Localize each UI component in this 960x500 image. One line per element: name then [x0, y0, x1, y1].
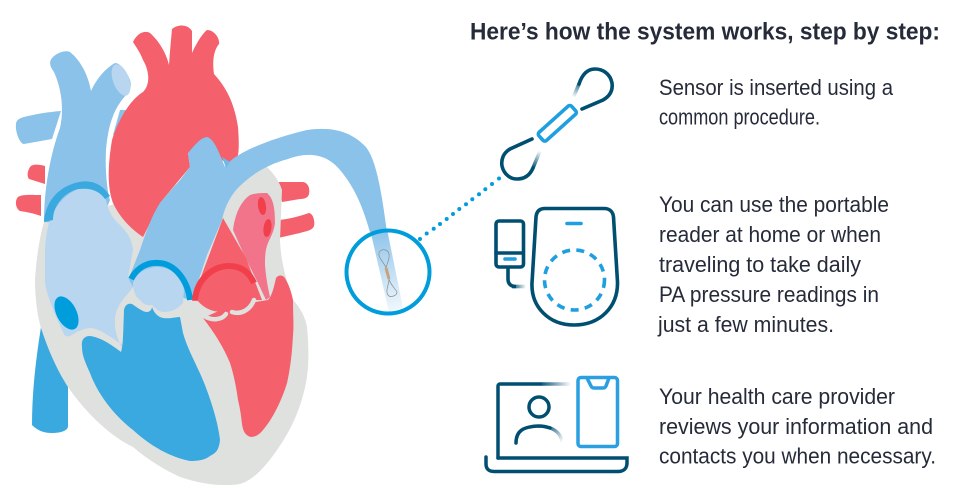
- text: step 3: [659, 384, 936, 468]
- magnifier background: [346, 230, 430, 314]
- icon: portable reader: [496, 208, 618, 325]
- phone notch: [587, 378, 609, 388]
- person head: [529, 397, 549, 417]
- heart illustration: [16, 25, 387, 485]
- magnifier: sensor in pulmonary artery: [346, 229, 430, 314]
- pulmonary valve arc: [131, 263, 190, 300]
- aorta: [109, 25, 239, 237]
- sensor body: [537, 104, 577, 142]
- adapter indicator: [505, 257, 515, 261]
- right pulmonary veins: [278, 182, 314, 238]
- phone body: [578, 378, 618, 446]
- left atrium: [233, 193, 275, 300]
- sensor bottom loop fade: [533, 151, 540, 168]
- aortic valve arc: [195, 266, 254, 300]
- adapter cord fade: [512, 285, 526, 288]
- pulmonary valve leaflets: [133, 267, 184, 312]
- text: step 1: common procedure.: [659, 104, 820, 130]
- left pulmonary artery branch: [16, 111, 61, 144]
- power adapter: [496, 221, 524, 267]
- text: step 1: Sensor is inserted using a: [659, 75, 894, 100]
- text: step 3: contacts you when necessary.: [659, 444, 936, 468]
- sensor top loop fade: [573, 84, 579, 98]
- reader dashed coil: [544, 250, 604, 310]
- pulmonary artery and tube: [128, 129, 387, 300]
- person shoulders: [516, 426, 550, 443]
- superior vena cava: [44, 51, 131, 225]
- laptop base: [486, 457, 627, 472]
- sensor top loop: [579, 69, 612, 109]
- aortic valve leaflets: [197, 270, 256, 312]
- icon: laptop and phone: [486, 378, 627, 472]
- right atrium: [45, 188, 133, 348]
- tiny sensor: [379, 250, 397, 296]
- text: step 2: [657, 192, 889, 337]
- right ventricle: [82, 304, 220, 461]
- sensor bottom loop: [502, 139, 533, 179]
- icon: sensor: [502, 69, 612, 179]
- text: step 2: traveling to take daily: [659, 252, 861, 277]
- left pulmonary veins: [16, 165, 45, 216]
- small pulmonary branch behind aorta: [113, 110, 132, 135]
- text: step 3: Your health care provider: [659, 384, 895, 409]
- text: step 3: reviews your information and: [659, 414, 933, 439]
- adapter divider: [496, 251, 523, 255]
- reader body: [532, 208, 618, 325]
- left ventricle: [203, 276, 293, 437]
- reader indicator: [567, 222, 581, 225]
- text: step 2: You can use the portable: [659, 192, 889, 217]
- right atrium opening: [49, 292, 84, 334]
- left atrium vein openings: [257, 197, 273, 237]
- text: step 2: just a few minutes.: [657, 312, 834, 337]
- person shoulders fade: [549, 428, 562, 442]
- dotted connector: [418, 176, 501, 241]
- arch shadow: [222, 157, 230, 168]
- heart muscle wall: [35, 167, 308, 485]
- right atrium valve arc: [44, 181, 110, 222]
- text: step 2: PA pressure readings in: [659, 282, 879, 307]
- aortic outflow: [192, 218, 262, 301]
- laptop screen: [498, 384, 540, 458]
- adapter cord: [508, 267, 516, 286]
- faded tube section: [370, 229, 403, 312]
- superior vena cava opening: [108, 62, 134, 98]
- laptop screen fade: [540, 382, 571, 386]
- text: step 1: [659, 75, 894, 130]
- inferior vena cava: [32, 327, 68, 433]
- magnifier ring: [346, 230, 430, 314]
- text: step 2: reader at home or when: [659, 222, 881, 247]
- aortic valve cusps: [204, 300, 254, 319]
